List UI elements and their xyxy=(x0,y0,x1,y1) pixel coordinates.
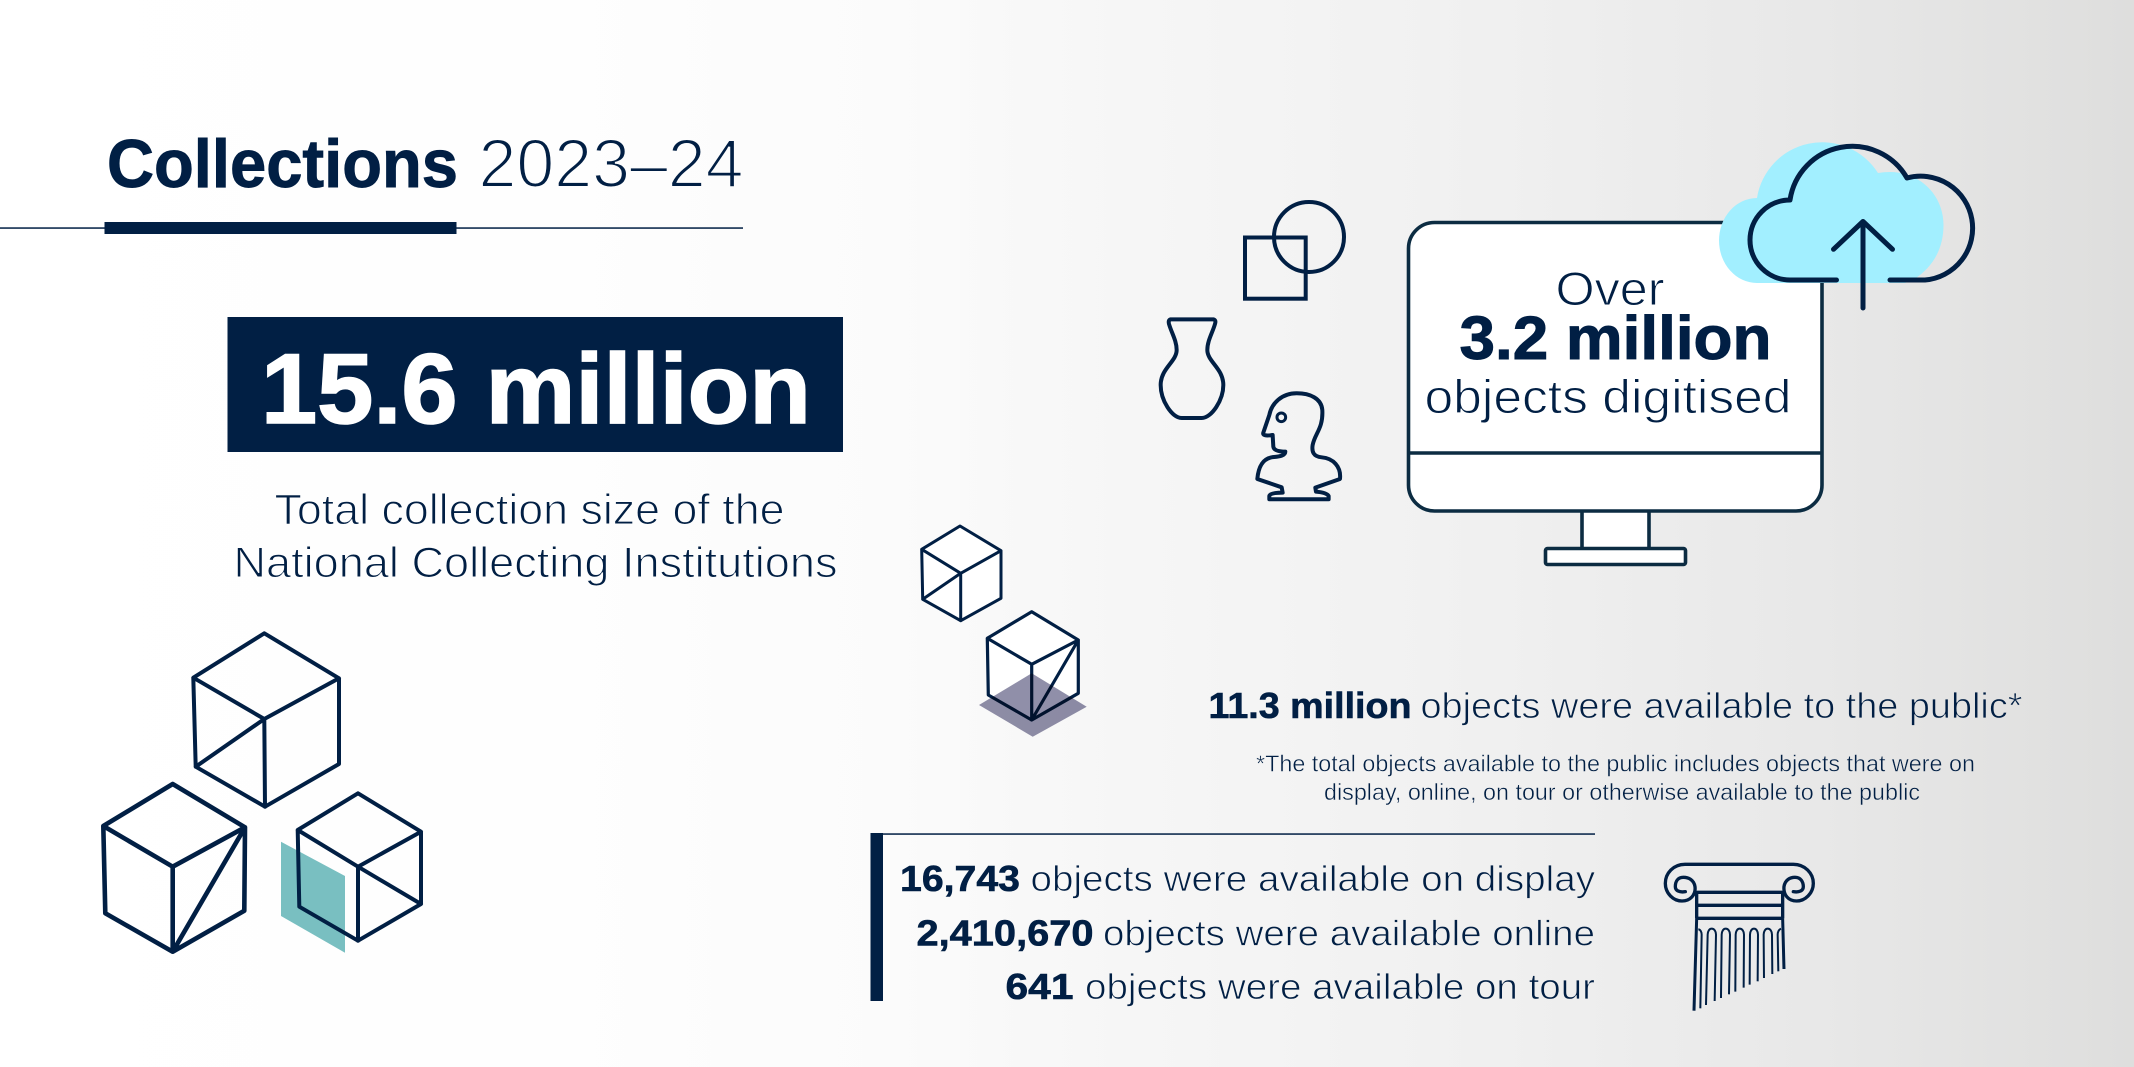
icon: square and circle xyxy=(1245,202,1344,299)
tour count: objects were available on tour xyxy=(1085,966,1595,1007)
title: 2023–24 xyxy=(478,125,744,202)
headline stat box: 15.6 million xyxy=(261,333,811,444)
display count: 16,743 xyxy=(900,858,1020,899)
panel: availability breakdown xyxy=(870,833,1595,1007)
title: Collections xyxy=(107,126,458,202)
digitised objects text: objects digitised xyxy=(1424,370,1792,423)
teal shadow xyxy=(281,842,345,953)
public availability statement: objects were available to the public* xyxy=(1420,685,2022,726)
tour count: 641 xyxy=(1006,966,1074,1007)
online count xyxy=(916,912,1595,954)
icon: ionic column xyxy=(1665,864,1813,1011)
stat description: Total collection size of the xyxy=(274,486,784,534)
footnote xyxy=(1256,750,1975,805)
icon: vase xyxy=(1161,319,1223,418)
title underline xyxy=(0,222,743,234)
online count: 2,410,670 xyxy=(916,912,1094,954)
digitised objects text xyxy=(1424,262,1792,423)
icon: bust xyxy=(1257,393,1340,499)
left rule xyxy=(870,833,883,1001)
online count: objects were available online xyxy=(1103,912,1595,954)
icon: cloud upload xyxy=(1719,142,1973,308)
right cube xyxy=(298,793,421,941)
icon: desktop monitor xyxy=(1408,222,1822,564)
footnote: display, online, on tour or otherwise available to the public xyxy=(1324,779,1920,805)
display count: objects were available on display xyxy=(1030,858,1595,899)
top rule xyxy=(883,833,1595,835)
icon: three cubes xyxy=(103,633,421,953)
digitised objects text: Over xyxy=(1556,262,1664,315)
digitised objects text: 3.2 million xyxy=(1460,304,1772,372)
public availability statement: 11.3 million xyxy=(1208,685,1412,726)
stat description xyxy=(234,486,838,587)
panel: total collection size xyxy=(228,317,843,587)
title xyxy=(107,125,744,202)
stat description: National Collecting Institutions xyxy=(234,539,838,587)
icon: small cube xyxy=(922,526,1001,621)
footnote: *The total objects available to the public includes objects that were on xyxy=(1256,750,1975,776)
top cube xyxy=(193,633,339,807)
left cube xyxy=(103,784,245,952)
icon: cube with shadow xyxy=(979,612,1087,737)
